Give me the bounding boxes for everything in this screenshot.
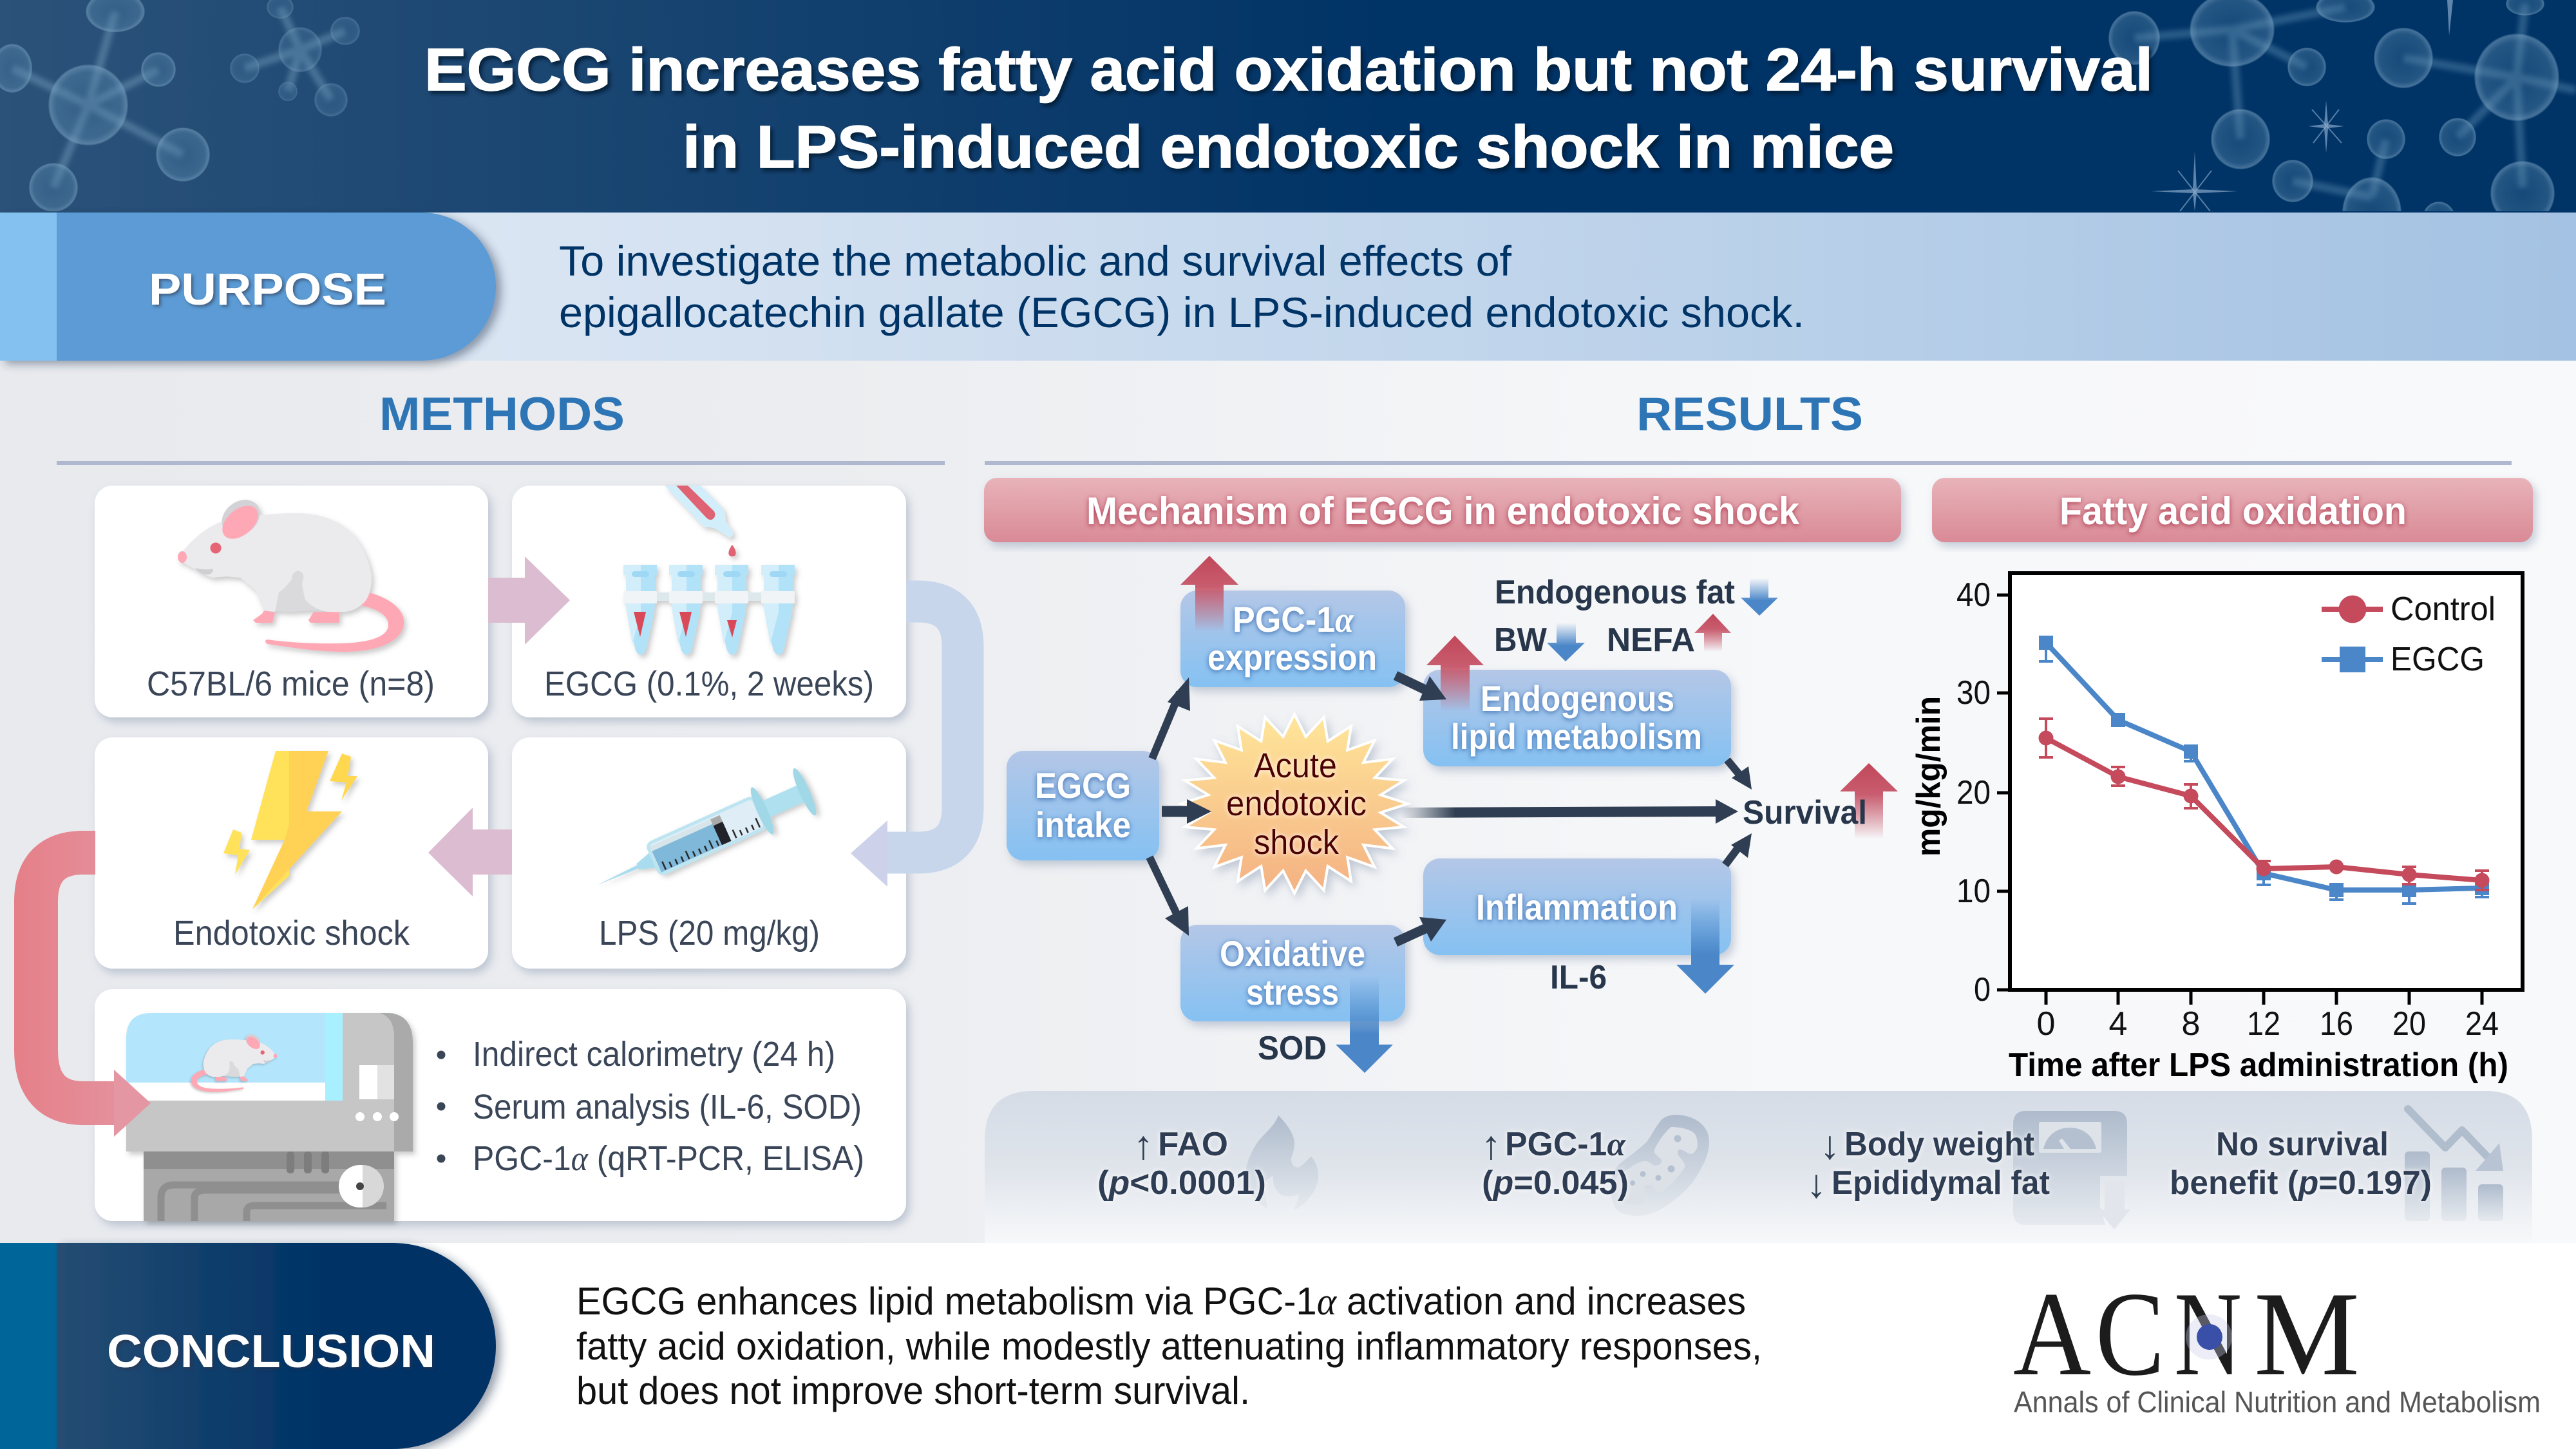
y axis labels: 10 [1956,873,1991,910]
measurement bullet list: Serum analysis (IL-6, SOD) [473,1088,862,1126]
label: body weight: BW [1494,621,1548,659]
chart legend [2322,591,2496,678]
chart legend: Control [2391,591,2496,628]
fatty acid oxidation header: Fatty acid oxidation [2060,489,2407,533]
label: mice: C57BL/6 mice (n=8) [147,665,435,703]
series: control [2039,719,2490,890]
x axis labels: 20 [2392,1005,2426,1043]
summary: no survival benefit: No survival [2216,1126,2389,1163]
x axis labels: 0 [2037,1005,2055,1043]
measurement bullet list: Indirect calorimetry (24 h) [473,1035,835,1074]
card: EGCG treatment [512,486,906,717]
results heading: RESULTS [1636,388,1863,440]
connector arrow: shock to measurements [36,853,151,1137]
journal logo: C [2096,1267,2164,1401]
series: EGCG [2039,636,2489,904]
label: NEFA: NEFA [1607,621,1695,659]
measurement bullet list: PGC-1α (qRT-PCR, ELISA) [473,1139,864,1178]
node: acute endotoxic shock: shock [1254,823,1340,862]
label: LPS: LPS (20 mg/kg) [599,914,820,952]
label: survival [1743,763,1898,839]
fatty acid oxidation header [1932,478,2533,542]
conclusion text [576,1280,1762,1412]
label: IL-6: IL-6 [1550,959,1607,996]
summary: PGC-1 alpha: ↑ [1481,1123,1501,1168]
label: endotoxic shock: Endotoxic shock [173,914,410,952]
summary: PGC-1 alpha: PGC-1α [1505,1126,1626,1163]
icon: flame [1245,1115,1318,1210]
node: PGC-1 alpha expression [1180,556,1405,687]
conclusion text: EGCG enhances lipid metabolism via PGC-1α activation and increases [576,1280,1746,1323]
x axis labels: 4 [2109,1005,2127,1043]
summary: body weight and fat: ↓ [1806,1162,1826,1206]
arrow: mice to EGCG [488,556,570,645]
mechanism header [984,478,1901,542]
results heading [985,388,2512,465]
summary: FAO: (p<0.0001) [1097,1164,1266,1202]
summary: body weight and fat: Body weight [1844,1126,2034,1163]
purpose band [0,213,2576,361]
journal logo: Annals of Clinical Nutrition and Metabolism [2014,1385,2541,1419]
summary: FAO: FAO [1158,1126,1228,1163]
node: oxidative stress: Oxidative [1220,933,1365,974]
node: endogenous lipid metabolism: Endogenous [1481,678,1674,719]
x axis labels: 16 [2320,1005,2353,1043]
summary: no survival benefit: benefit (p=0.197) [2170,1164,2432,1202]
conclusion label pill: CONCLUSION [107,1326,435,1378]
measurement bullet list [437,1035,864,1178]
purpose label pill [0,213,496,361]
icon: syringe [587,766,820,909]
node: oxidative stress: stress [1246,972,1339,1012]
molecule decoration: right [2108,0,2576,211]
title: in LPS-induced endotoxic shock in mice [683,113,1894,180]
card: mice [95,486,488,717]
icon: mitochondrion [1610,1115,1709,1216]
chart legend: EGCG [2391,641,2485,678]
conclusion text: fatty acid oxidation, while modestly attenuating inflammatory responses, [576,1325,1762,1368]
x axis labels: 12 [2247,1005,2280,1043]
y axis title: mg/kg/min [1910,696,1947,857]
node: inflammation [1423,858,1734,994]
y axis labels [1956,576,1991,1009]
conclusion text: but does not improve short-term survival. [576,1369,1250,1412]
card: LPS [512,737,906,969]
node: PGC-1 alpha expression: expression [1208,637,1377,677]
purpose text [559,237,1804,336]
x axis labels: 8 [2182,1005,2200,1043]
summary: FAO: ↑ [1133,1123,1153,1168]
icon: declining chart [2405,1109,2503,1221]
label: NEFA [1607,614,1731,659]
x axis title: Time after LPS administration (h) [2009,1046,2508,1084]
y axis labels: 20 [1956,774,1991,811]
x axis labels [2037,1005,2499,1043]
arrow: LPS to shock [428,808,512,896]
mechanism header: Mechanism of EGCG in endotoxic shock [1086,489,1800,533]
icon: calorimeter [126,1013,413,1221]
connector arrow: EGCG to LPS [851,601,963,887]
icon: weighing scale [2013,1111,2130,1229]
title: EGCG increases fatty acid oxidation but not 24-h survival [424,36,2153,103]
journal logo: A [2013,1267,2091,1401]
conclusion label pill [0,1243,496,1449]
node: endogenous lipid metabolism [1423,636,1731,766]
y axis labels: 0 [1974,971,1991,1009]
node: acute endotoxic shock: endotoxic [1226,784,1367,823]
x axis labels: 24 [2465,1005,2499,1043]
label: body weight [1494,621,1585,661]
label: SOD: SOD [1258,1030,1327,1067]
purpose text: epigallocatechin gallate (EGCG) in LPS-induced endotoxic shock. [559,289,1804,336]
chart axes ticks [1997,595,2482,1005]
journal logo [2013,1267,2541,1419]
node: acute endotoxic shock: Acute [1254,746,1337,785]
summary: no survival benefit [2170,1126,2432,1202]
y axis labels: 30 [1956,674,1991,712]
summary: PGC-1 alpha [1481,1123,1629,1202]
node: endogenous lipid metabolism: lipid metabolism [1451,716,1702,757]
node: acute endotoxic shock [1181,714,1408,893]
summary: body weight and fat [1806,1123,2050,1206]
summary panel [985,1091,2532,1243]
summary: FAO [1097,1123,1266,1202]
mechanism flow diagram [1007,556,1898,1073]
icon: pipette and tubes [623,486,795,655]
node: EGCG intake [1007,751,1159,860]
icon: mouse [178,493,404,652]
flow arrows [1150,676,1752,942]
conclusion background [0,1243,2576,1449]
icon: lightning [223,751,357,909]
summary: body weight and fat: ↓ [1820,1123,1840,1168]
tube 2 [669,565,703,655]
card: endotoxic shock [95,737,488,969]
label: endogenous fat: Endogenous fat [1495,574,1735,611]
tube 3 [715,565,748,655]
line chart: fatty acid oxidation [1910,573,2523,1084]
title [424,36,2153,180]
methods heading: METHODS [379,388,625,440]
journal logo: M [2254,1267,2360,1401]
node: inflammation: Inflammation [1476,887,1678,927]
purpose label pill: PURPOSE [149,264,386,314]
tube 1 [623,565,657,655]
node: EGCG intake: intake [1036,804,1131,845]
methods heading [57,388,945,465]
node: oxidative stress [1180,925,1405,1073]
label: survival: Survival [1743,794,1867,831]
purpose text: To investigate the metabolic and survival effects of [559,237,1512,285]
tube 4 [761,565,795,655]
node: EGCG intake: EGCG [1035,765,1131,806]
journal logo: N [2174,1267,2242,1401]
node: PGC-1 alpha expression: PGC-1α [1233,599,1354,640]
header banner [0,0,2576,213]
molecule decoration: left [0,0,360,212]
y axis labels: 40 [1956,576,1991,614]
label: EGCG treatment: EGCG (0.1%, 2 weeks) [544,665,874,703]
card: measurements [95,989,906,1221]
page background [0,361,2576,1243]
summary: PGC-1 alpha: (p=0.045) [1482,1164,1629,1202]
summary: body weight and fat: Epididymal fat [1832,1164,2050,1202]
